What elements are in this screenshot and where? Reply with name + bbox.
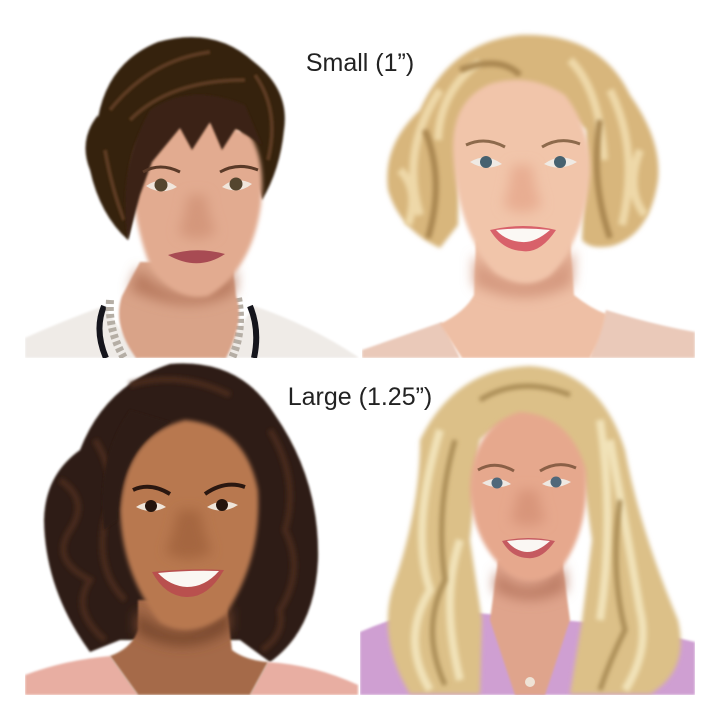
neck shadow xyxy=(130,268,236,305)
eyes xyxy=(133,485,245,512)
smile xyxy=(502,538,555,558)
eyes xyxy=(478,465,576,488)
portrait: short wavy blonde hair xyxy=(362,35,695,358)
shirt button xyxy=(525,677,535,687)
hair xyxy=(86,37,285,240)
hair texture xyxy=(105,52,272,220)
fringe xyxy=(125,95,262,240)
face xyxy=(453,80,590,283)
hair shadows xyxy=(432,386,625,690)
mouth xyxy=(168,250,225,263)
portrait: dark curly hair xyxy=(25,363,358,695)
nose xyxy=(503,165,542,212)
top: lilac shirt xyxy=(360,610,695,695)
nose xyxy=(165,510,212,559)
smile xyxy=(490,226,556,251)
neck shadow xyxy=(136,605,230,646)
eyes xyxy=(466,141,580,168)
hair highlights xyxy=(400,60,645,225)
hair highlights xyxy=(415,420,643,690)
face xyxy=(470,412,586,580)
top: pink blouse xyxy=(25,656,358,695)
nose xyxy=(510,490,546,526)
eyes xyxy=(143,166,258,192)
hair xyxy=(387,35,658,248)
cheek and nose shading xyxy=(178,195,216,239)
neck xyxy=(110,600,268,695)
hair shadows xyxy=(425,64,610,238)
hair xyxy=(44,363,318,662)
neck and chest xyxy=(490,560,570,695)
neck shadow xyxy=(494,565,566,600)
neck and chest xyxy=(440,240,606,358)
top: blush lace blouse xyxy=(362,310,695,358)
hair xyxy=(388,366,681,694)
forehead sweep of hair xyxy=(102,422,169,530)
face xyxy=(132,119,262,297)
portrait: short dark brown pixie hair xyxy=(25,37,358,358)
caption: small: Small (1”) xyxy=(306,49,414,77)
caption: large: Large (1.25”) xyxy=(288,383,432,411)
smile xyxy=(152,569,224,597)
curl texture xyxy=(60,379,294,650)
neck xyxy=(119,262,239,358)
neck shadow xyxy=(474,250,574,298)
top: white blouse with black trim xyxy=(25,298,358,358)
face xyxy=(120,420,258,630)
portrait: long wavy blonde hair xyxy=(360,366,695,695)
